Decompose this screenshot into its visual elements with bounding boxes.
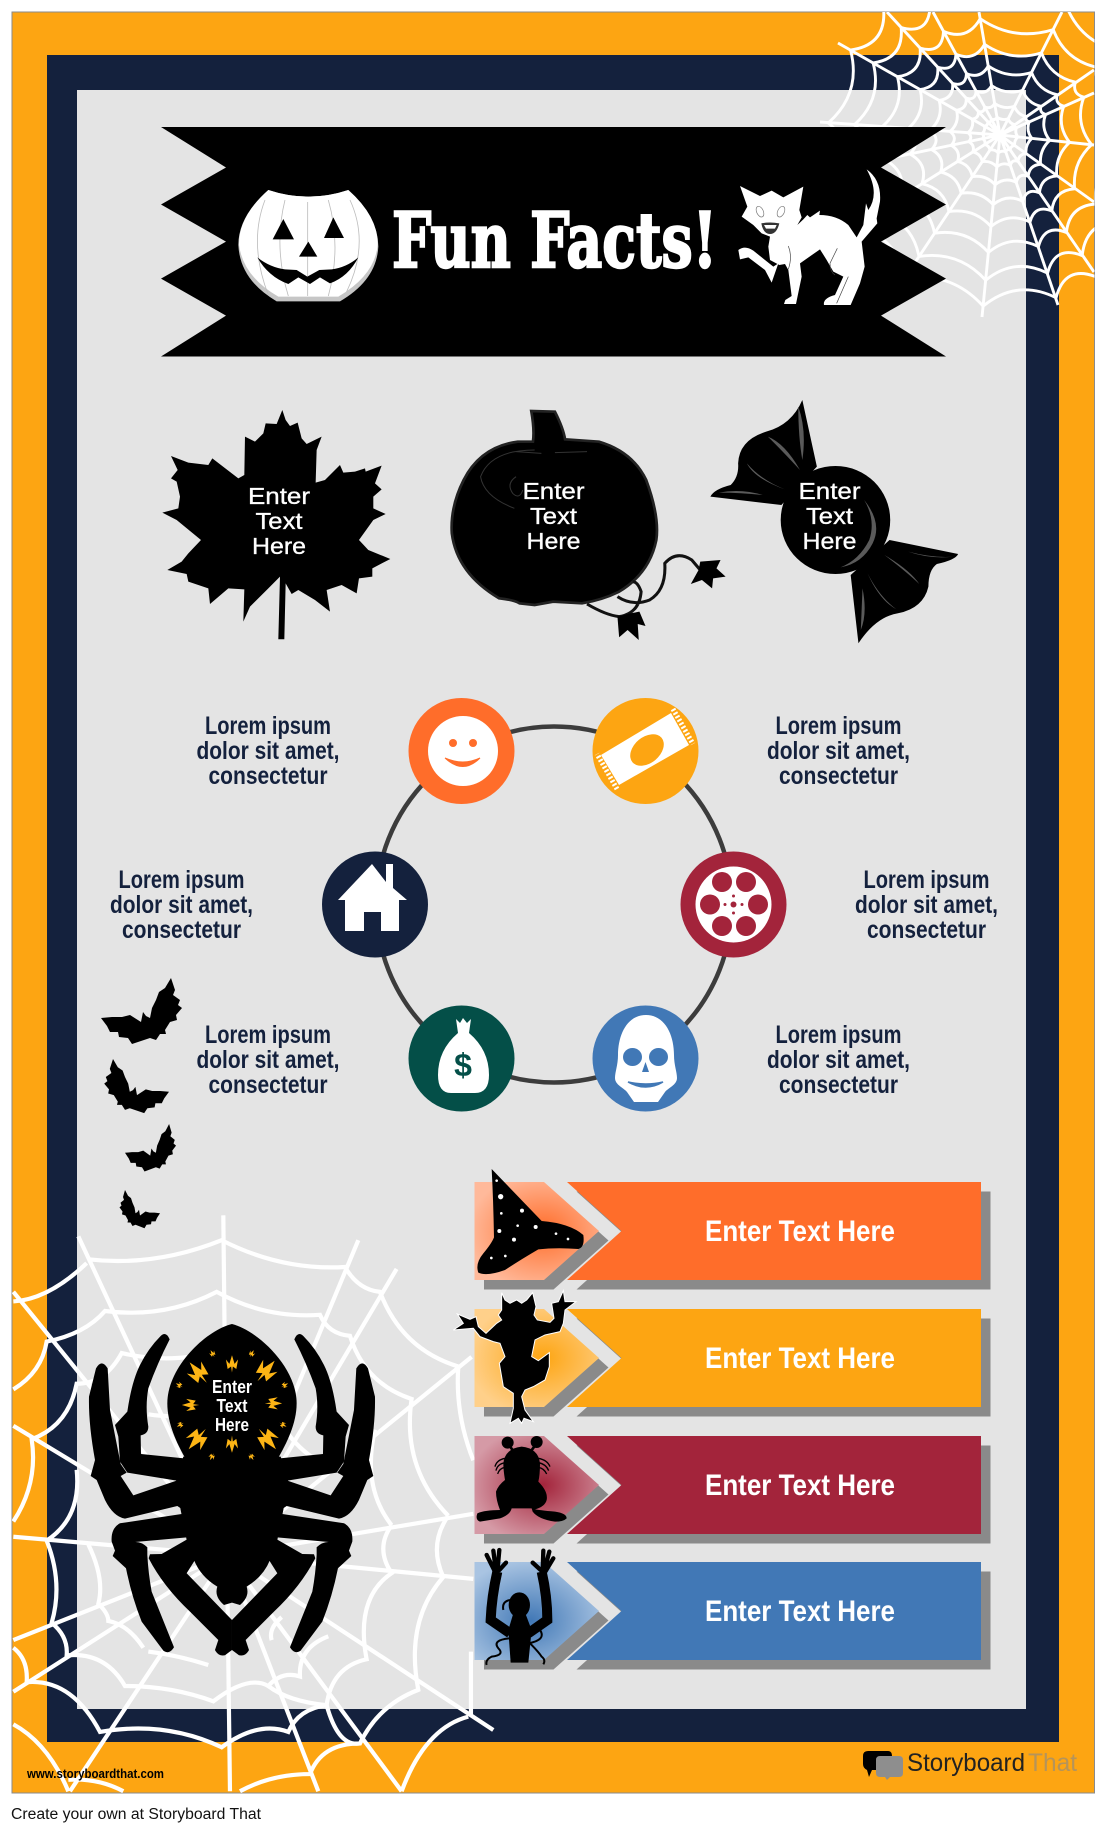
lorem text: top left: dolor sit amet, bbox=[196, 737, 340, 765]
spider with text bbox=[89, 1324, 375, 1656]
lorem text: middle right: dolor sit amet, bbox=[855, 891, 998, 919]
arrow row: orange bbox=[474, 1182, 990, 1290]
lorem text: bottom left: consectetur bbox=[208, 1071, 328, 1099]
spider text: Here bbox=[215, 1415, 249, 1435]
arrow row: blue: Enter Text Here bbox=[705, 1595, 895, 1628]
bottom left spider web bbox=[13, 1215, 493, 1791]
top right spider web bbox=[820, 0, 1107, 317]
spider text: Text bbox=[216, 1396, 248, 1416]
icon: candy circle bbox=[592, 698, 698, 804]
icon: werewolf bbox=[453, 1291, 576, 1423]
logo bubbles bbox=[863, 1751, 903, 1780]
icon: pumpkin bbox=[452, 411, 726, 640]
icon: money bag circle bbox=[408, 1006, 514, 1112]
pumpkin text: Here bbox=[526, 528, 580, 554]
arrow row: amber: Enter Text Here bbox=[705, 1342, 895, 1375]
icon: maple leaf bbox=[162, 410, 390, 639]
icon: money bag circle: $ bbox=[454, 1047, 472, 1083]
lorem text: top right: dolor sit amet, bbox=[767, 737, 910, 765]
leaf text: Here bbox=[252, 533, 306, 559]
lorem text: middle right: Lorem ipsum bbox=[864, 866, 990, 894]
logo text: Storyboard bbox=[907, 1749, 1025, 1777]
lorem text: bottom right: Lorem ipsum bbox=[776, 1021, 902, 1049]
spider silhouette bbox=[89, 1324, 375, 1656]
lorem text: top left: consectetur bbox=[208, 762, 328, 790]
icon: horned monster bbox=[477, 1436, 567, 1522]
icon: zombie arms bbox=[486, 1550, 553, 1665]
arrow row: orange: Enter Text Here bbox=[705, 1215, 895, 1248]
candy text: Text bbox=[806, 503, 854, 529]
banner ribbon bbox=[161, 127, 946, 356]
icon: house circle bbox=[322, 852, 428, 958]
icon: flying bats bbox=[101, 978, 182, 1228]
pumpkin text: Enter bbox=[522, 478, 585, 504]
dark pumpkin shape bbox=[452, 411, 726, 640]
icon: cat bbox=[738, 169, 880, 305]
grey content panel bbox=[77, 90, 1026, 1709]
website label: www.storyboardthat.com bbox=[26, 1766, 164, 1781]
spider text: Enter bbox=[212, 1377, 252, 1397]
arrow row: crimson bbox=[474, 1436, 990, 1544]
lorem text: bottom left: Lorem ipsum bbox=[205, 1021, 331, 1049]
lorem text: bottom right: consectetur bbox=[779, 1071, 898, 1099]
lorem text: middle right: consectetur bbox=[867, 916, 986, 944]
leaf shape bbox=[162, 410, 390, 639]
leaf text: Text bbox=[256, 508, 303, 534]
arrow row: blue bbox=[474, 1562, 990, 1670]
icon: jack-o-lantern bbox=[238, 190, 378, 301]
ring connector bbox=[376, 726, 732, 1082]
lorem text: middle left: dolor sit amet, bbox=[110, 891, 253, 919]
lorem text: top left: Lorem ipsum bbox=[205, 712, 331, 740]
arrow row: crimson: Enter Text Here bbox=[705, 1469, 895, 1502]
lorem text: bottom right: dolor sit amet, bbox=[767, 1046, 910, 1074]
footer caption: Create your own at Storyboard That bbox=[11, 1806, 262, 1823]
logo text: That bbox=[1028, 1749, 1077, 1777]
arrow row: amber bbox=[474, 1309, 990, 1416]
lorem text: middle left: Lorem ipsum bbox=[118, 866, 244, 894]
candy text: Here bbox=[802, 528, 856, 554]
lorem text: middle left: consectetur bbox=[122, 916, 241, 944]
icon: skull circle bbox=[592, 1006, 698, 1112]
lorem text: top right: consectetur bbox=[779, 762, 898, 790]
candy shape bbox=[710, 400, 958, 643]
icon: witch hat bbox=[477, 1169, 584, 1274]
pumpkin text: Text bbox=[530, 503, 578, 529]
icon: film reel circle bbox=[680, 852, 786, 958]
candy text: Enter bbox=[798, 478, 861, 504]
icon: smiley circle bbox=[408, 698, 514, 804]
lorem text: bottom left: dolor sit amet, bbox=[196, 1046, 340, 1074]
lorem text: top right: Lorem ipsum bbox=[776, 712, 902, 740]
title text: Fun Facts! bbox=[392, 196, 717, 285]
storyboardthat logo bbox=[863, 1749, 1077, 1780]
title banner bbox=[161, 127, 946, 356]
leaf text: Enter bbox=[248, 483, 310, 509]
icon: wrapped candy bbox=[710, 400, 958, 643]
